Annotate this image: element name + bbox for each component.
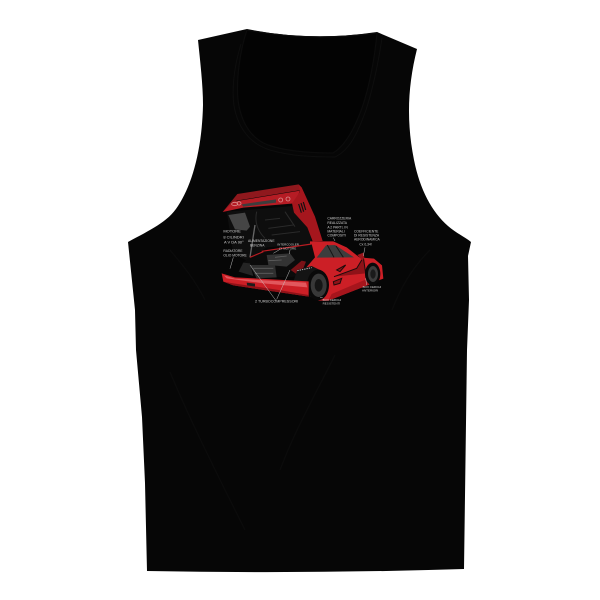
- fabric folds: [170, 250, 430, 530]
- label: intercooler: [277, 243, 300, 250]
- clamshell underside: [227, 206, 312, 261]
- label: drag coefficient: AERODINAMICA: [354, 238, 380, 242]
- side vents: [299, 202, 306, 213]
- label: turbochargers: 2 TURBOCOMPRESSORI: [255, 300, 298, 304]
- engine bay: [239, 244, 315, 278]
- label: engine: [223, 229, 244, 244]
- label: rear wheel: BOX CERCHI: [323, 298, 341, 302]
- tail panel: [223, 191, 300, 212]
- clamshell side arm: [292, 184, 323, 241]
- door cut lines: [333, 257, 366, 285]
- engine block: [267, 253, 295, 267]
- label: oil radiator: [223, 249, 248, 257]
- label: rear wheel: [323, 298, 341, 306]
- tread highlights: [297, 268, 312, 271]
- side windows: [317, 245, 354, 258]
- collar stitching: [233, 38, 382, 157]
- label: front wheel: ANTERIORI: [362, 289, 378, 293]
- clamshell arm strut: [250, 225, 255, 257]
- tail lights: [232, 197, 290, 206]
- clamshell top surface: [223, 184, 301, 212]
- label: bodywork: REALIZZATA: [327, 221, 348, 225]
- label: intercooler: INTERCOOLER: [277, 243, 300, 247]
- rear fender tread: [293, 266, 328, 301]
- label: engine: A V DA 90°: [224, 239, 244, 244]
- lower door shade: [328, 278, 368, 301]
- label: fuel: [248, 239, 275, 247]
- label: front wheel: [362, 285, 381, 293]
- label: fuel: BENZINA: [250, 243, 265, 247]
- label: front wheel: BOX CERCHI: [363, 285, 381, 289]
- label: oil radiator: RADIATORE: [223, 249, 243, 253]
- label: bodywork: COMPOSITI: [327, 234, 346, 238]
- label: drag coefficient: DI RESISTENZA: [354, 234, 380, 238]
- car body: [297, 241, 383, 301]
- label: engine: 8 CILINDRI: [223, 234, 244, 239]
- label: bodywork: CARROZZERIA: [327, 216, 352, 220]
- mirror and door pillar: [357, 253, 364, 261]
- label: intercooler: DI MOTORE: [279, 246, 296, 250]
- gray interior panel: [228, 213, 250, 231]
- label: rear wheel: RESISTENTI: [323, 302, 340, 306]
- open rear clamshell: [223, 184, 323, 261]
- callout arrows: [230, 238, 367, 301]
- car illustration: [222, 184, 383, 306]
- label: oil radiator: OLIO MOTORE: [223, 253, 248, 257]
- rear wheel: [307, 270, 329, 300]
- neckline collar: [237, 30, 377, 153]
- label: drag coefficient: COEFFICIENTE: [354, 230, 379, 234]
- front wheel: [365, 263, 380, 285]
- label: fuel: ALIMENTAZIONE: [248, 239, 275, 243]
- rear bumper: [222, 273, 309, 297]
- label: bodywork: [327, 216, 352, 238]
- label: drag coefficient: [354, 230, 380, 247]
- interior ribs: [256, 212, 300, 238]
- label: bodywork: MATERIALI: [327, 230, 345, 234]
- label: engine: MOTORE: [223, 229, 241, 234]
- label: drag coefficient: Cx 0,34!: [359, 243, 372, 247]
- tank top garment: [128, 29, 471, 572]
- label: bodywork: A 2 PARTI, IN: [327, 225, 348, 229]
